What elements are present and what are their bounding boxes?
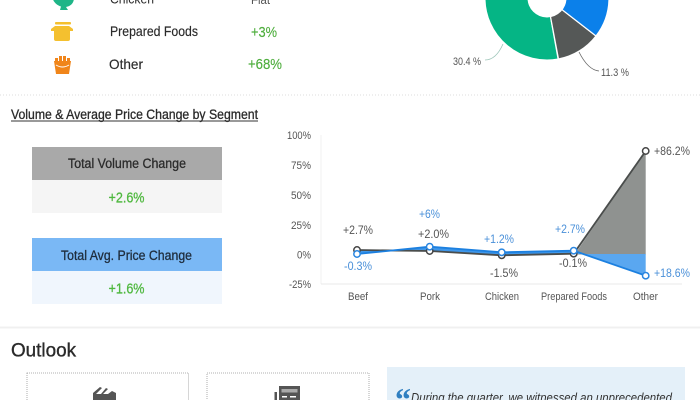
panel: segment price table bbox=[51, 0, 282, 74]
line: volume bbox=[357, 151, 646, 255]
x axis labels bbox=[348, 291, 658, 303]
value: price change: +1.6% bbox=[108, 282, 145, 298]
value: volume change: +2.6% bbox=[108, 190, 145, 206]
x axis labels: Pork bbox=[420, 291, 440, 303]
donut callout: 30.4 %: 30.4 % bbox=[453, 56, 481, 68]
line: price bbox=[357, 247, 646, 276]
y axis labels: 25% bbox=[291, 220, 311, 232]
data labels: volume: +86.2% bbox=[654, 144, 690, 158]
label: total volume change: Total Volume Change bbox=[68, 156, 186, 171]
y axis labels: 100% bbox=[287, 130, 311, 142]
donut callout: 11.3 %: 11.3 % bbox=[601, 67, 629, 79]
donut callout: 30.4 % bbox=[453, 44, 503, 68]
x axis labels: Other bbox=[633, 291, 658, 303]
data labels: volume: -1.5% bbox=[490, 266, 518, 280]
panel: outlook card two bbox=[207, 373, 369, 400]
y axis labels: 75% bbox=[291, 160, 311, 172]
data labels: volume bbox=[343, 144, 690, 280]
panel: quote bbox=[387, 367, 685, 400]
row value: other: +68% bbox=[248, 57, 282, 73]
x axis labels: Chicken bbox=[485, 291, 519, 303]
panel: outlook card one bbox=[27, 373, 188, 400]
heading: volume and price: Volume & Average Price Change by Segment bbox=[11, 107, 258, 122]
icon: fries bbox=[54, 56, 71, 74]
donut segment: blue bbox=[547, 0, 609, 36]
donut chart bbox=[453, 0, 629, 79]
data labels: price: +6% bbox=[419, 207, 440, 221]
markers: price bbox=[354, 244, 649, 279]
y axis labels bbox=[287, 130, 311, 291]
data labels: price: +2.7% bbox=[555, 222, 585, 236]
row value: prepared foods: +3% bbox=[251, 25, 277, 41]
y axis labels: 50% bbox=[291, 190, 311, 202]
area: price bbox=[576, 252, 646, 276]
donut hole bbox=[528, 0, 566, 18]
markers: volume bbox=[354, 148, 649, 258]
icon: books bbox=[93, 387, 116, 400]
data labels: price: +18.6% bbox=[654, 266, 690, 280]
area: volume bbox=[576, 151, 646, 254]
x axis labels: Beef bbox=[348, 291, 369, 303]
panel: total average price change bbox=[32, 238, 222, 304]
data labels: volume: -0.1% bbox=[559, 256, 587, 270]
x axis labels: Prepared Foods bbox=[541, 291, 607, 303]
y axis labels: 0% bbox=[297, 250, 311, 262]
data labels: volume: +2.7% bbox=[343, 223, 373, 237]
icon: chicken bbox=[52, 0, 74, 10]
donut callout: 11.3 % bbox=[579, 52, 629, 79]
y axis labels: -25% bbox=[289, 279, 311, 291]
donut segment: dark grey bbox=[547, 0, 596, 59]
heading: outlook: Outlook bbox=[11, 340, 76, 362]
label: total average price change: Total Avg. Price Change bbox=[61, 248, 192, 263]
data labels: price bbox=[344, 207, 690, 280]
icon: cooking pot bbox=[51, 22, 73, 41]
row label: prepared foods: Prepared Foods bbox=[110, 23, 198, 39]
icon: newspaper bbox=[274, 386, 300, 400]
data labels: price: -0.3% bbox=[344, 259, 372, 273]
donut segment: green bbox=[470, 0, 558, 60]
data labels: volume: +2.0% bbox=[418, 227, 449, 241]
row label: other: Other bbox=[109, 56, 143, 72]
data labels: price: +1.2% bbox=[484, 232, 514, 246]
line chart: volume and price by segment bbox=[287, 130, 690, 303]
panel: total volume change bbox=[32, 147, 222, 213]
